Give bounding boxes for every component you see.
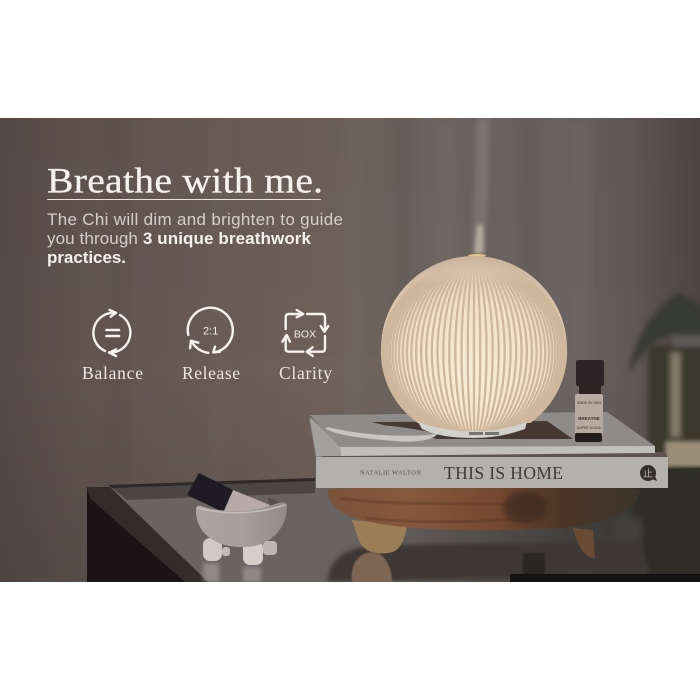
intro text bbox=[47, 210, 343, 267]
wall with curtain folds bbox=[0, 118, 700, 582]
icon labels: Clarity bbox=[279, 363, 332, 383]
remote control bbox=[325, 424, 437, 442]
bottle label: BREATHE bbox=[578, 416, 600, 421]
table frame bbox=[87, 478, 315, 582]
plant and vase bbox=[628, 292, 700, 470]
bowl reflection bbox=[203, 563, 261, 582]
book author: NATALIE WALTON bbox=[360, 470, 421, 476]
infographic canvas bbox=[0, 118, 700, 582]
icon labels: Balance bbox=[82, 363, 143, 383]
wooden tray bbox=[328, 488, 640, 582]
bottle label bbox=[577, 401, 602, 430]
icon labels: Release bbox=[182, 363, 240, 383]
publisher logo bbox=[640, 465, 657, 481]
photo scene bbox=[0, 118, 700, 582]
ribbed ceramic sphere diffuser bbox=[381, 256, 567, 442]
icon: balance cycle bbox=[93, 310, 130, 356]
intro text: practices. bbox=[47, 248, 126, 267]
icon: clarity box cycle bbox=[282, 310, 328, 356]
bottle label: MADE BY ZEN bbox=[577, 401, 601, 405]
diffuser base bbox=[418, 422, 527, 438]
upper book bbox=[310, 412, 655, 456]
heading: Breathe with me. bbox=[47, 161, 323, 201]
box label: BOX bbox=[294, 328, 316, 340]
intro text: The Chi will dim and brighten to guide bbox=[47, 210, 343, 229]
ratio label: 2:1 bbox=[203, 326, 218, 338]
bottle label: SUPER BLEND bbox=[577, 426, 602, 430]
essential oil bottle bbox=[575, 360, 604, 442]
icon: release 2:1 cycle bbox=[188, 308, 233, 353]
book title: THIS IS HOME bbox=[444, 463, 563, 483]
table glass surface bbox=[108, 468, 700, 582]
icon labels bbox=[82, 363, 332, 383]
lower book: This Is Home bbox=[309, 418, 668, 488]
publisher logo: 止 bbox=[643, 468, 653, 480]
mist plume bbox=[468, 118, 490, 257]
intro text: you through 3 unique breathwork bbox=[47, 229, 312, 248]
ceramic bowl with bottle bbox=[187, 473, 287, 565]
